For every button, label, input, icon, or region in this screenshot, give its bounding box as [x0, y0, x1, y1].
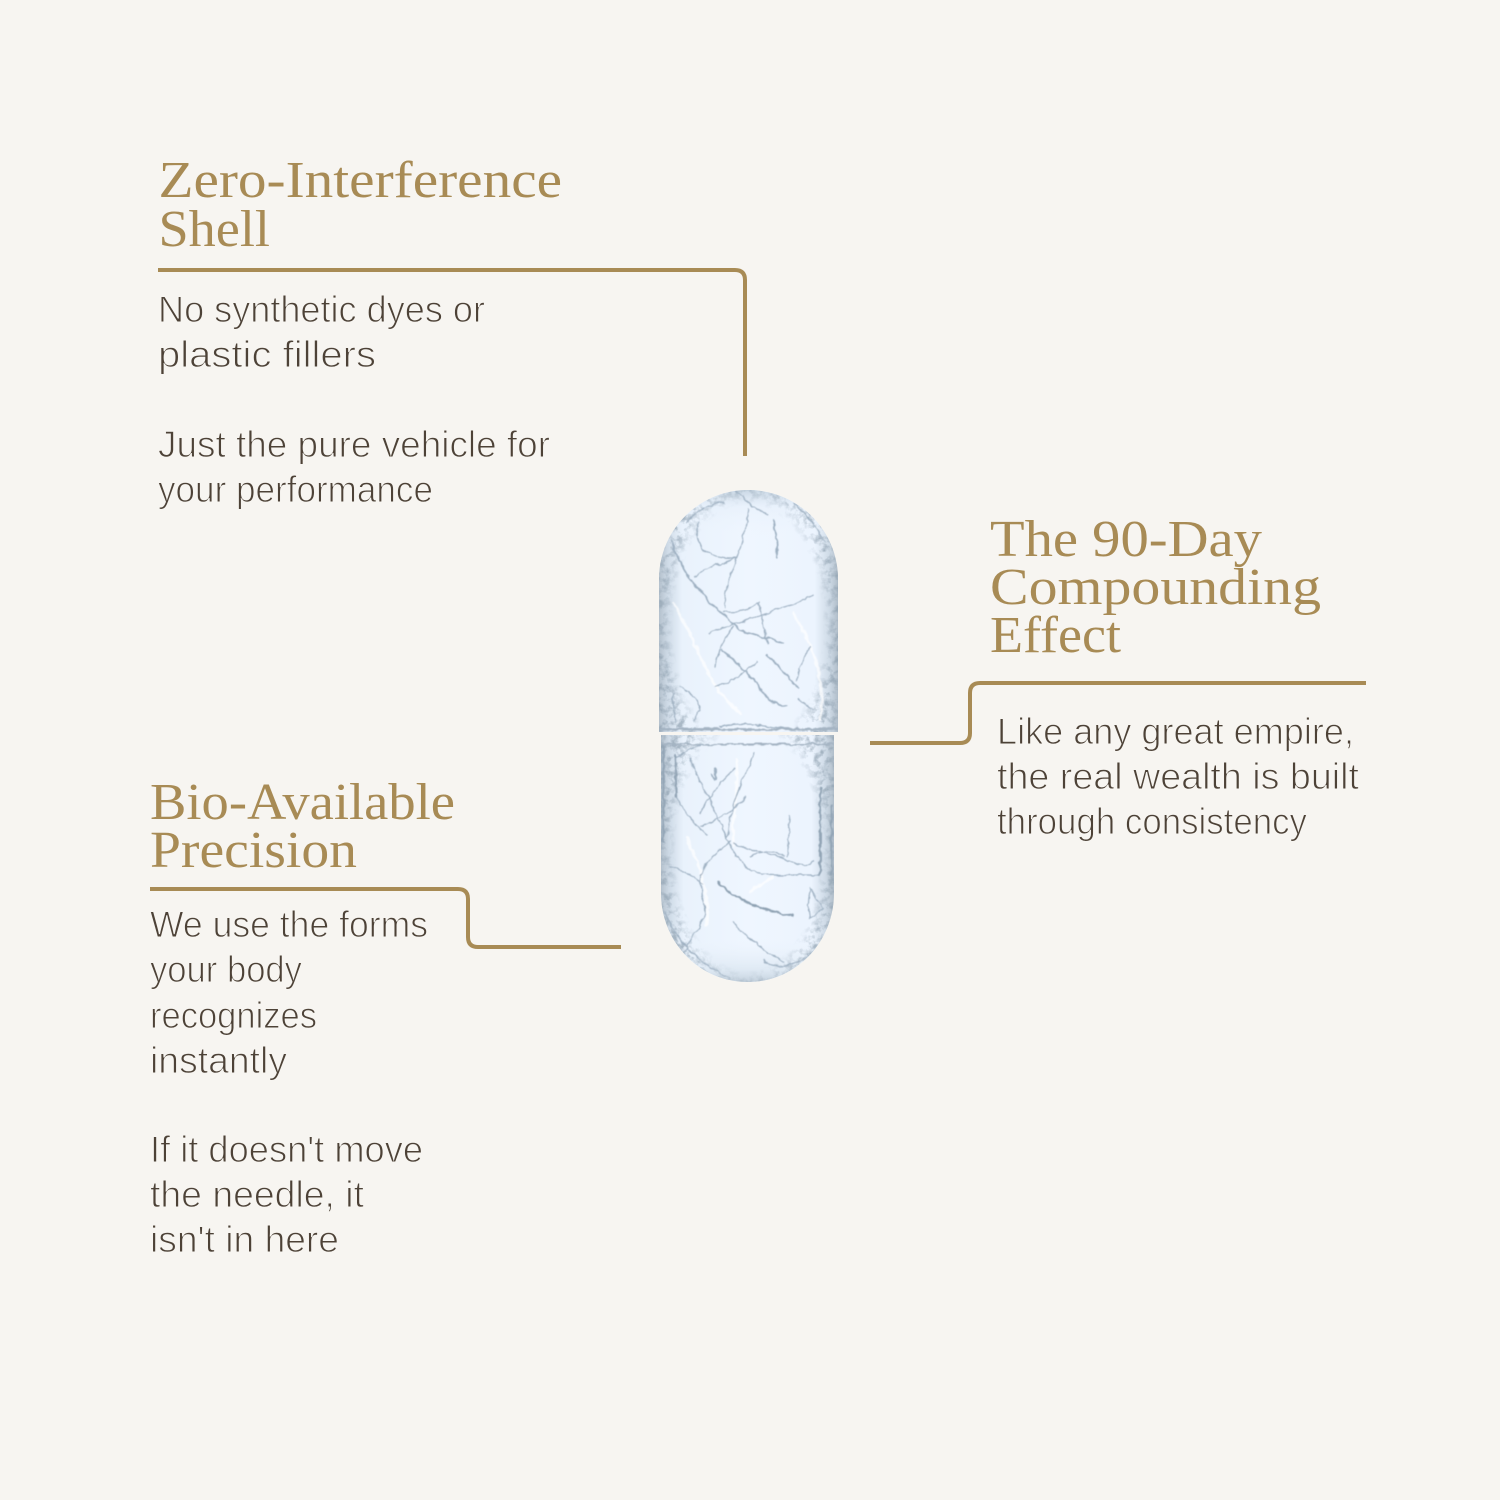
- illustration: marble capsule: [659, 490, 838, 982]
- panel: The 90-Day Compounding Effect: [870, 511, 1366, 842]
- heading: Zero-Interference Shell: [158, 152, 562, 258]
- heading: Bio-Available Precision: Precision: [150, 822, 357, 879]
- text block: shell description: Just the pure vehicle for: [158, 424, 550, 465]
- panel: Zero-Interference Shell: [158, 152, 745, 510]
- text block: precision description: instantly: [150, 1040, 288, 1081]
- text block: precision description: We use the forms: [150, 904, 428, 945]
- heading: Zero-Interference Shell: Shell: [158, 201, 270, 258]
- heading: Bio-Available Precision: [150, 774, 455, 879]
- text block: precision description: [150, 904, 428, 1260]
- heading: The 90-Day Compounding Effect: Compounding: [990, 559, 1321, 616]
- heading: The 90-Day Compounding Effect: The 90-Day: [990, 511, 1262, 568]
- heading: The 90-Day Compounding Effect: [990, 511, 1321, 664]
- text block: compounding description: [997, 711, 1360, 842]
- text block: shell description: your performance: [158, 469, 433, 510]
- text block: compounding description: through consistency: [997, 801, 1307, 842]
- text block: precision description: recognizes: [150, 995, 317, 1036]
- connector line: right callout: [870, 683, 1366, 743]
- connector line: left callout: [150, 889, 621, 947]
- capsule upper half: [659, 490, 838, 732]
- text block: precision description: your body: [150, 949, 302, 990]
- heading: The 90-Day Compounding Effect: Effect: [990, 607, 1122, 664]
- text block: precision description: If it doesn't move: [150, 1129, 423, 1170]
- heading: Zero-Interference Shell: Zero-Interference: [158, 152, 562, 209]
- text block: compounding description: the real wealth is built: [997, 756, 1360, 797]
- panel: Bio-Available Precision: [150, 774, 621, 1260]
- text block: shell description: No synthetic dyes or: [158, 289, 485, 330]
- text block: precision description: isn't in here: [150, 1219, 339, 1260]
- heading: Bio-Available Precision: Bio-Available: [150, 774, 455, 831]
- text block: precision description: the needle, it: [150, 1174, 365, 1215]
- text block: shell description: [158, 289, 550, 510]
- text block: shell description: plastic fillers: [158, 334, 376, 375]
- text block: compounding description: Like any great empire,: [997, 711, 1354, 752]
- capsule lower half: [661, 735, 834, 982]
- connector line: top callout: [158, 270, 745, 456]
